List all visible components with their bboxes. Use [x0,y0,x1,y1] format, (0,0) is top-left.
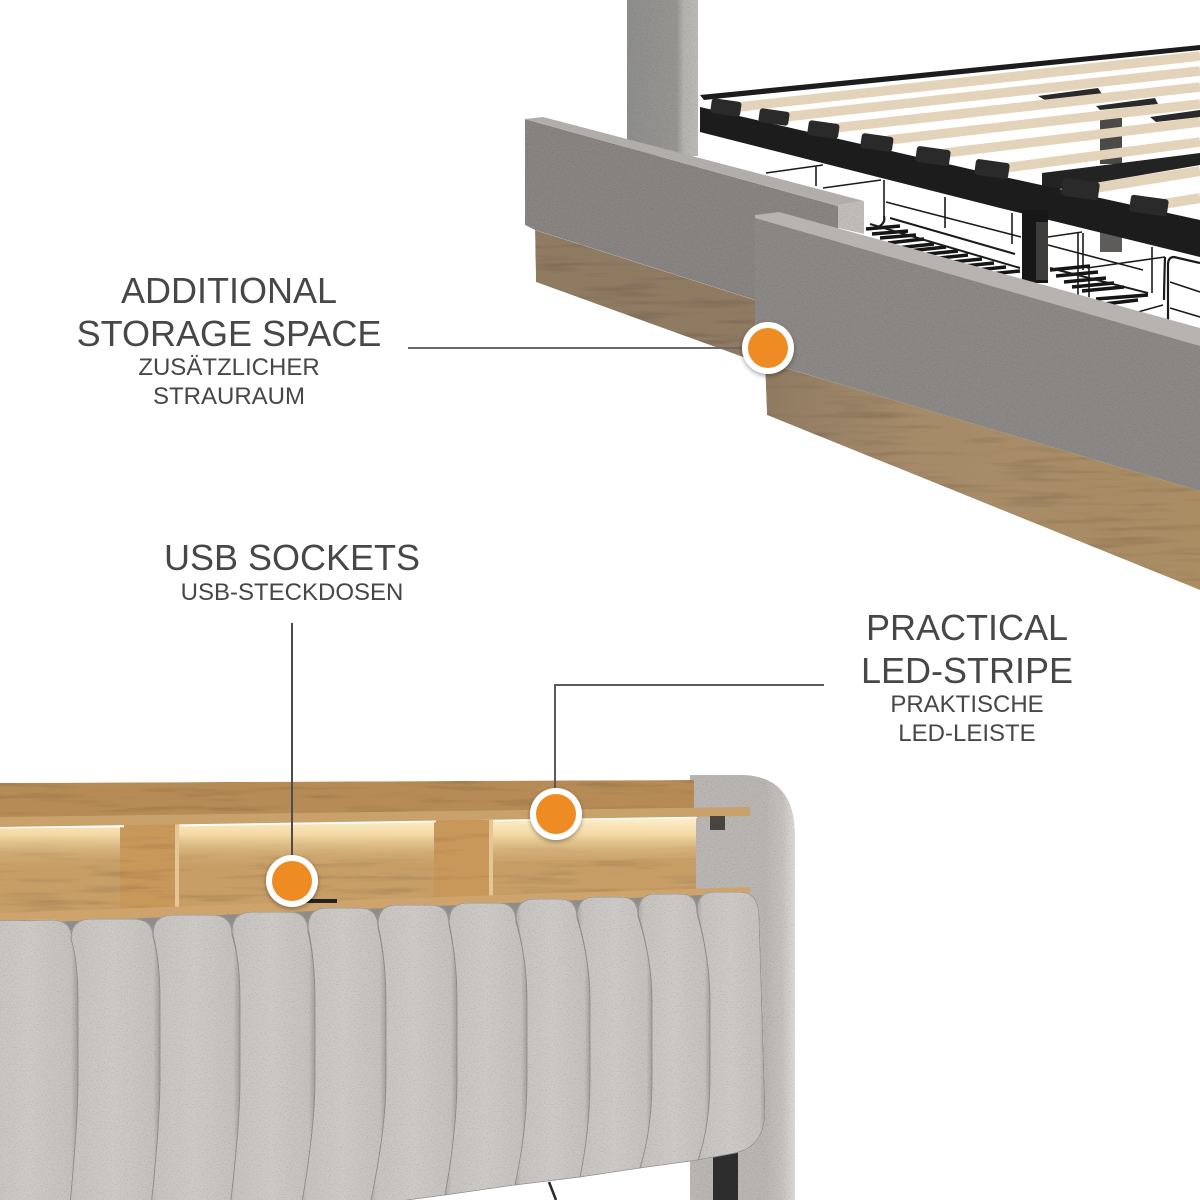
marker: orange dot [742,322,794,374]
shelf back panel [0,780,694,825]
USB socket [305,899,337,903]
leader line [408,347,750,349]
front wood base [765,362,1200,590]
wooden slats [738,56,1200,168]
storage basket [766,165,1200,320]
power cable [549,1182,556,1200]
upper shelf [0,807,750,827]
LED strip [0,817,697,827]
bed frame photo [525,0,1200,590]
callout: additional storage space [77,270,794,410]
german subtitle second line: STRAURAUM [153,383,305,410]
shelf dividers [120,820,493,912]
slat caps [710,98,1169,217]
heading: practical LED stripe: PRACTICAL [866,607,1068,648]
german subtitle second line: LED-LEISTE [898,720,1036,747]
headboard photo [0,775,795,1200]
back rail [700,45,1200,100]
german subtitle: ZUSÄTZLICHER [138,354,320,381]
centre rail [1038,88,1200,252]
headboard wing [690,775,795,1200]
left wood base [535,230,755,362]
marker: orange dot [530,788,582,840]
leader line [291,623,293,860]
callout: USB sockets [164,537,420,907]
heading: additional storage space: ADDITIONAL [121,270,337,311]
front side panel [755,212,1200,491]
german subtitle: USB-STECKDOSEN [181,579,403,606]
leader line [555,685,824,790]
shelf bracket [710,816,725,830]
bed leg [713,1150,738,1200]
side rail second section [1042,153,1200,192]
heading: USB sockets: USB SOCKETS [164,537,420,578]
heading second line: LED-STRIPE [861,650,1073,691]
heading second line: STORAGE SPACE [77,313,381,354]
marker: orange dot [266,855,318,907]
left side panel [525,117,864,300]
cushion backing shadow [0,890,745,950]
upholstered cushions [0,892,765,1200]
lower wood compartment [0,816,696,915]
wooden slats front [1095,171,1200,204]
metal leg [1022,210,1048,283]
callout: practical LED stripe [530,607,1073,840]
german subtitle: PRAKTISCHE [890,691,1044,718]
lower shelf [0,887,750,924]
headboard post [627,0,698,156]
metal side rail [700,107,1200,257]
